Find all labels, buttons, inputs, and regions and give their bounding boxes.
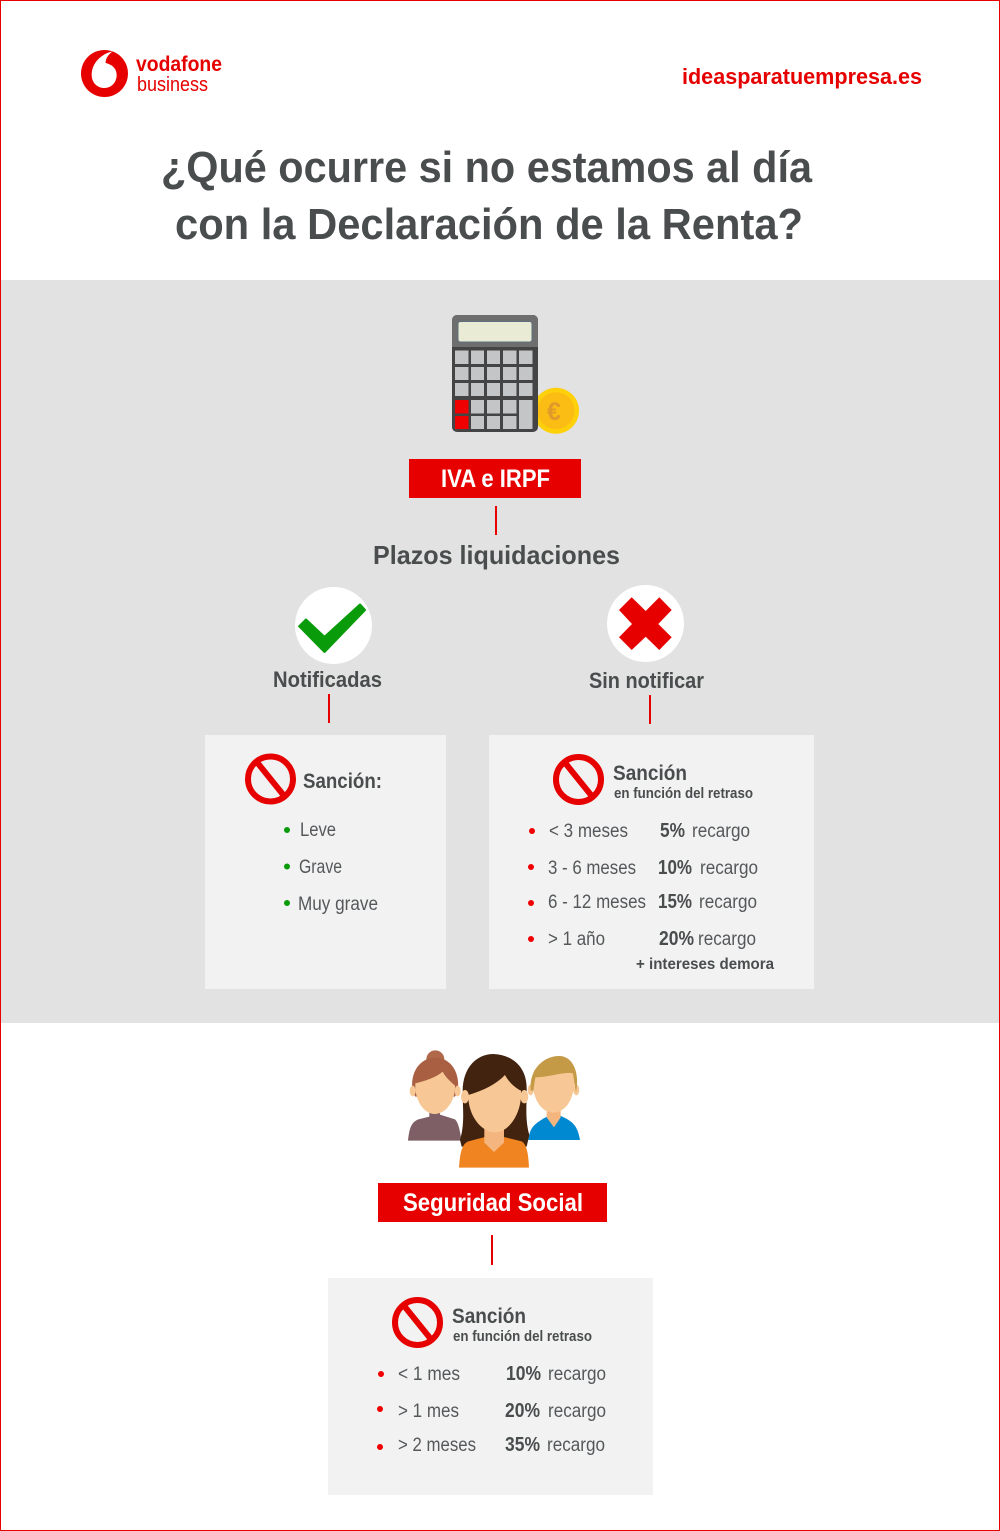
connector: seguridad social (491, 1235, 493, 1265)
label: notificadas: Notificadas (273, 667, 382, 692)
list: severity levels: Grave (299, 857, 342, 878)
table: surcharge by delay: recargo (700, 858, 758, 879)
table: surcharge by delay: recargo (692, 821, 750, 842)
panel: sanción notificadas (205, 735, 446, 989)
connector: IVA to plazos (495, 506, 497, 535)
heading: IVA e IRPF (409, 459, 581, 498)
table: surcharge by delay: 35% (505, 1434, 540, 1456)
table: surcharge by delay: recargo (548, 1401, 606, 1422)
list: severity levels: Leve (300, 820, 336, 841)
icon: vodafone speech mark (81, 50, 128, 97)
table: surcharge by delay: recargo (698, 929, 756, 950)
title: con la Declaración de la Renta? (175, 200, 803, 249)
table: surcharge by delay: 10% (506, 1363, 541, 1385)
table: surcharge by delay: < 1 mes (398, 1364, 460, 1385)
table: surcharge by delay: 3 - 6 meses (548, 858, 636, 879)
list: severity levels: Muy grave (298, 894, 378, 915)
panel heading: Sanción (452, 1305, 526, 1328)
connector: sin notificar (649, 695, 651, 724)
table: surcharge by delay (377, 1363, 606, 1456)
wordmark: business: business (137, 74, 208, 96)
table: surcharge by delay: 20% (659, 928, 694, 950)
icon: green check (295, 587, 372, 664)
icon: prohibited sign (395, 1300, 440, 1345)
panel heading: en función del retraso (614, 786, 753, 802)
table: surcharge by delay: 5% (660, 820, 685, 842)
table: surcharge by delay: 10% (658, 857, 692, 879)
icon: calculator with coin (452, 315, 579, 434)
table: surcharge by delay: recargo (547, 1435, 605, 1456)
icon: group of people (408, 1050, 580, 1168)
table: surcharge by delay: 6 - 12 meses (548, 892, 646, 913)
icon: prohibited sign (556, 757, 601, 802)
label: sin notificar: Sin notificar (589, 668, 704, 693)
connector: notificadas (328, 694, 330, 723)
table: surcharge by delay: > 1 año (548, 929, 605, 950)
table: surcharge by delay: recargo (699, 892, 757, 913)
title (161, 143, 812, 249)
table: surcharge by delay: > 2 meses (398, 1435, 476, 1456)
note: intereses de demora: + intereses demora (636, 956, 774, 973)
table: surcharge by delay: recargo (548, 1364, 606, 1385)
title: ¿Qué ocurre si no estamos al día (161, 143, 812, 192)
heading: IVA e IRPF: IVA e IRPF (441, 465, 550, 493)
logo: vodafone business (81, 50, 222, 97)
list: severity levels (284, 820, 378, 915)
panel: sanción seguridad social (328, 1278, 653, 1495)
front woman (459, 1054, 529, 1168)
icon: prohibited sign (248, 756, 293, 802)
table: surcharge by delay: < 3 meses (549, 821, 628, 842)
right man (528, 1056, 580, 1140)
icon: red cross (607, 585, 684, 662)
heading: seguridad social: Seguridad Social (403, 1189, 583, 1217)
panel: sanción sin notificar (489, 735, 814, 989)
heading: plazos liquidaciones: Plazos liquidaciones (373, 540, 620, 570)
icon: calculator with coin: € (547, 398, 561, 426)
wordmark: vodafone: vodafone (136, 53, 222, 76)
left woman (408, 1050, 462, 1141)
table: surcharge by delay: 20% (505, 1400, 540, 1422)
panel heading (613, 762, 753, 802)
panel heading: Sanción (613, 762, 687, 785)
website url: ideasparatuempresa.es (682, 64, 922, 89)
table: surcharge by delay: 15% (658, 891, 692, 913)
table: surcharge by delay: > 1 mes (398, 1401, 459, 1422)
heading: seguridad social (378, 1183, 607, 1222)
panel heading (452, 1305, 592, 1345)
panel heading: Sanción: (303, 770, 382, 793)
table: surcharge by delay (528, 820, 758, 950)
panel heading: en función del retraso (453, 1329, 592, 1345)
